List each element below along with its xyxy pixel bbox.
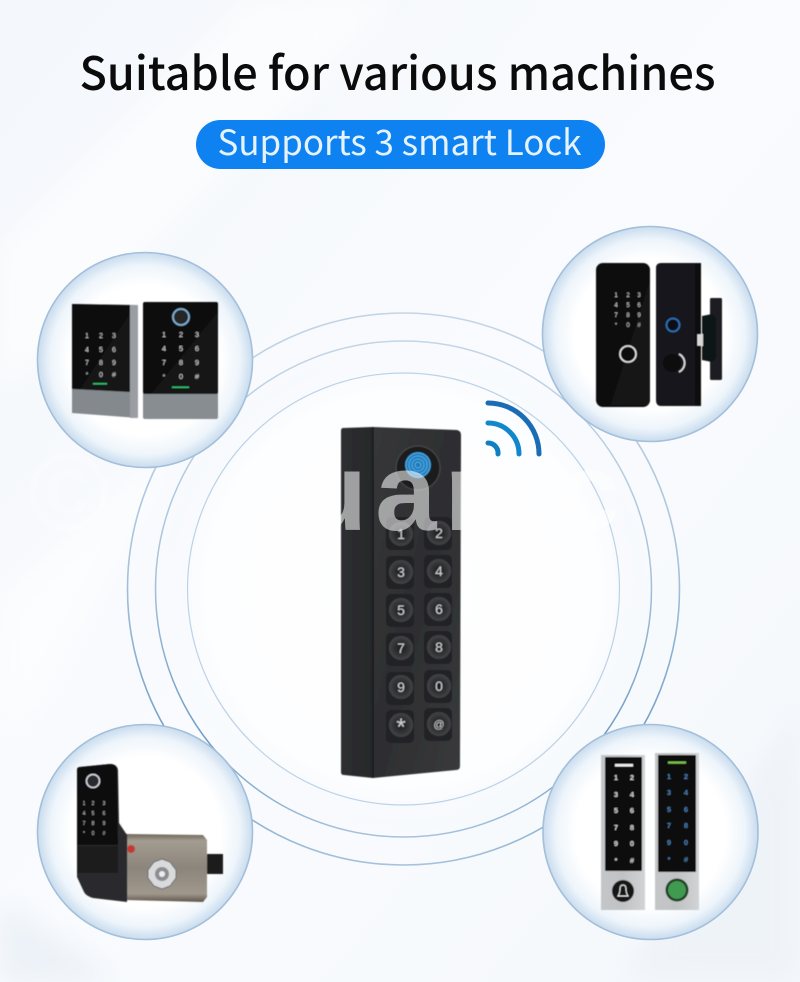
keypad numerals: * [396,714,406,741]
device: grey keypad angled: 8 [99,360,103,367]
device: grey keypad with fingerprint: 3 [195,330,199,339]
device: grey keypad with fingerprint: 9 [195,358,199,367]
device: grey keypad with fingerprint: * [163,372,166,381]
bubble: bottom-left rim lock [38,724,252,940]
device: handle with fingerprint: 3 [103,801,106,807]
device: lock front panel: 6 [637,303,641,309]
device: handle with fingerprint: * [83,831,85,837]
keypad numerals [396,525,445,741]
subtitle pill: Supports 3 smart Lock [218,115,582,166]
keypad numerals: 0 [435,678,443,694]
device: lock rear panel [656,263,701,406]
device: grey keypad angled: 4 [85,347,89,354]
device: lock front panel: 4 [614,303,618,309]
bubble: top-left keypads [38,252,252,468]
device: keypad with bell: 5 [614,806,618,815]
device: handle with fingerprint: 9 [103,821,106,827]
device: grey keypad with fingerprint: 1 [162,330,166,339]
device: handle with fingerprint [77,764,127,902]
watermark: © [28,431,109,554]
device: lock front panel: 8 [626,313,630,319]
device: grey keypad angled: # [112,372,116,379]
device: lock front panel: 0 [626,323,630,329]
device: grey keypad with fingerprint: 7 [162,358,166,367]
keypad numerals: 6 [435,601,443,617]
device: keypad with green fingerprint: 8 [684,821,688,830]
device: grey keypad angled: 7 [85,360,89,367]
device: handle with fingerprint: # [103,831,106,837]
keypad numerals: 9 [397,679,405,695]
wifi signal icon [488,403,539,454]
device: grey keypad with fingerprint: 2 [179,330,183,339]
keypad buttons [386,517,452,743]
device: grey keypad angled: 1 [85,333,89,340]
device: keypad with bell: 1 [614,773,618,782]
device: handle with fingerprint: 2 [92,801,95,807]
device: keypad with bell: 2 [630,773,634,782]
keypad numerals: 2 [435,525,443,541]
device: handle with fingerprint: 1 [83,801,86,807]
device: handle with fingerprint: 5 [92,811,95,817]
device: grey keypad angled: 6 [112,347,116,354]
device: keypad with green fingerprint: 9 [667,838,671,847]
device: lock front panel: 3 [637,293,641,299]
bubble: bottom-right metal keypads [543,724,758,940]
watermark [28,431,627,554]
device: keypad with green fingerprint: 6 [684,805,688,814]
device: door bracket [697,298,722,380]
keypad numerals: 5 [397,602,405,618]
device: keypad with green fingerprint: 0 [684,838,688,847]
main keypad device [341,427,461,778]
device: keypad with bell: 6 [630,806,634,815]
title: Suitable for various machines [80,38,716,104]
device: grey keypad angled: 2 [99,333,103,340]
device: grey keypad angled: 3 [112,333,116,340]
device: grey keypad angled: * [86,372,89,379]
device: lock front panel: # [637,323,641,329]
device: handle with fingerprint: 0 [92,831,95,837]
device: grey keypad with fingerprint: 4 [162,344,166,353]
device: keypad with bell: 4 [630,790,635,799]
device: lock front panel: 2 [626,293,630,299]
device: keypad with bell: 8 [630,823,634,832]
device: keypad with green fingerprint [655,753,699,910]
device: handle with fingerprint: 8 [92,821,95,827]
device: rim lock body [124,834,223,902]
device: handle with fingerprint: 7 [83,821,86,827]
device: keypad with green fingerprint: 1 [667,772,671,781]
device: grey keypad angled: 0 [99,372,103,379]
device: keypad with bell: 9 [614,839,618,848]
device: keypad with green fingerprint: # [684,855,689,864]
device: keypad with green fingerprint: * [668,855,671,864]
device: grey keypad angled: 5 [99,347,103,354]
device: grey keypad with fingerprint [143,302,218,419]
device: keypad with green fingerprint: 2 [684,772,688,781]
device: keypad with bell: 3 [614,790,618,799]
keypad numerals: 1 [397,526,405,542]
device: handle with fingerprint: 6 [103,811,106,817]
device: grey keypad with fingerprint: # [195,372,200,381]
device: keypad with green fingerprint: 3 [667,788,671,797]
keypad numerals: 8 [435,639,443,655]
device: lock front panel: 7 [614,313,618,319]
keypad numerals: 7 [397,640,405,656]
device side and front [341,427,461,778]
bubble: top-right glass door lock [542,226,758,442]
device: keypad with bell: 0 [630,839,634,848]
device: grey keypad with fingerprint: 5 [179,344,183,353]
device: handle with fingerprint: 4 [83,811,86,817]
device: keypad with bell: * [615,856,618,865]
device: keypad with bell: # [630,856,635,865]
device: grey keypad with fingerprint: 8 [179,358,183,367]
keypad numerals: 4 [435,563,443,579]
device: keypad with green fingerprint: 7 [667,821,671,830]
keypad numerals: @ [433,719,445,731]
device: grey keypad angled: 9 [112,360,116,367]
watermark: uan.c [300,431,627,554]
device: keypad with green fingerprint: 5 [667,805,671,814]
device: grey keypad with fingerprint: 6 [195,344,199,353]
keypad numerals: 3 [397,564,405,580]
device: lock front panel [596,263,650,407]
device: lock front panel: 1 [614,293,618,299]
fingerprint sensor [396,446,440,490]
device: lock front panel: 9 [637,313,641,319]
device: keypad with green fingerprint: 4 [684,788,689,797]
device: grey keypad angled [72,304,138,418]
concentric rings [128,313,680,865]
device: keypad with bell: 7 [614,823,618,832]
device: lock front panel: * [615,323,618,329]
device: keypad with bell [601,755,645,910]
device: lock front panel: 5 [626,303,630,309]
device: grey keypad with fingerprint: 0 [179,372,183,381]
